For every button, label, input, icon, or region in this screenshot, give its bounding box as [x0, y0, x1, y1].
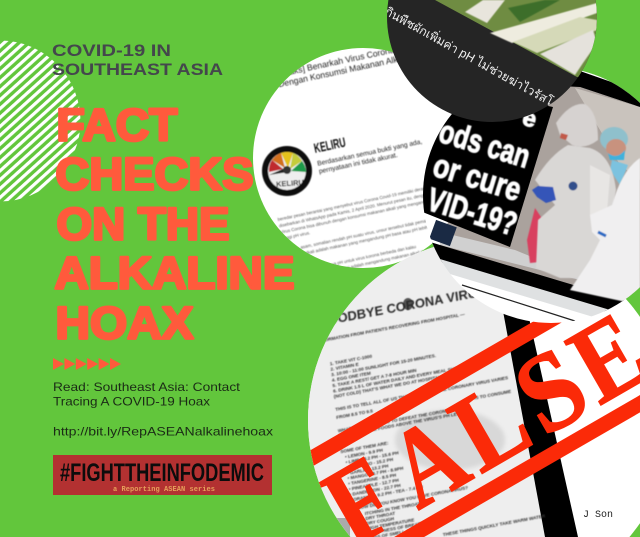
article body: disebarkan di WhatsApp pada Kamis, 2 April 2020. Menurut pesan itu, dengan merujuk ke: [279, 187, 451, 228]
Thai caption: กินพืชผักเพิ่มค่า pH ไม่ช่วยฆ่าไวรัสโค: [383, 3, 564, 113]
leaflet text: IS TO CONSUME: [474, 389, 511, 401]
leaflet text: DRY COUGH: [366, 516, 395, 526]
title: ON THE: [56, 198, 230, 250]
pink bag: [527, 208, 543, 263]
leaflet text: HOW DID YOU KNOW YOU HAVE CORONAVIRUS?: [357, 485, 468, 510]
leaflet text: • ORANGE - 9.2 PH - TEA - 7.4 PH: [350, 484, 424, 503]
question text: or cure: [429, 146, 526, 208]
photo of vegetables: [435, 0, 605, 80]
article body: Namun, asam, somalian rendah pH suatu virus, unsur tersebut tidak pemakan bakteri: [284, 214, 447, 253]
article body: [277, 187, 428, 268]
red FALSE stamp: [310, 314, 640, 537]
leaflet text: THIS IS TO TELL ALL OF US THAT THE PH OF THE CORONARY VIRUS VARIES: [335, 375, 508, 412]
read more text: [53, 380, 273, 438]
title: [54, 100, 294, 348]
banner: a Reporting ASEAN series: [113, 486, 215, 494]
leaflet text: • LIME - 8.2 PH - 15.6 PH: [345, 450, 399, 465]
read more text: http://bit.ly/RepASEANalkalinehoax: [53, 424, 273, 438]
article body: Pesan ini pemuat bahwa pH untuk virus korona berbeda dan kalau: [289, 244, 417, 276]
small photo patch: [429, 220, 457, 246]
leaflet text: SOME OF THEM ARE:: [340, 440, 389, 454]
leaflet text: FROM 8.5 TO 9.5: [336, 408, 374, 420]
subheading: COVID-19 IN: [52, 42, 171, 60]
red FALSE stamp: A: [369, 392, 488, 532]
title: FACT: [56, 100, 178, 150]
question text: ods can: [435, 112, 535, 175]
leaflet text: • AVOCADO - 15.2 PH: [346, 457, 394, 470]
bottom frame: [432, 242, 624, 312]
leaflet text: 2. VITAMIN E: [330, 361, 359, 372]
question text: [430, 114, 537, 236]
title: CHECKS: [56, 148, 254, 200]
leaflet text: INFORMATION FROM PATIENTS RECOVERING FROM HOSPITAL —: [317, 312, 465, 344]
article body: beredar pesan berantai yang menyebut virus Corona Covid-19 memiliki derajat keasaman (pH): [277, 179, 459, 222]
leaflet text: • DANDELION - 22.7 PH: [349, 483, 401, 497]
leaflet text: [314, 277, 546, 537]
black strip: [504, 314, 578, 537]
article body: Virus Corona bisa dibunuh dengan konsumsi makanan alkali yang mengandung: [280, 197, 433, 235]
striped circle: [0, 40, 80, 202]
leaflet text: DRY THROAT: [365, 511, 396, 521]
verdict text: KELIRU: [313, 135, 347, 156]
fact check headline: [Hoaks] Benarkah Virus Corona Bisa Dibunuh: [275, 33, 448, 79]
leaflet text: MORE ALKALINE FOODS ABOVE THE VIRUS'S PH LEVEL.: [338, 409, 467, 438]
article body: makanan alkali adalah makanan yang mengandung pH basa atau pH lebih dari: [285, 223, 437, 260]
banner: [53, 455, 272, 495]
read more text: Tracing A COVID-19 Hoax: [53, 394, 210, 408]
leaflet text: 6. DRINK 1.5 L OF WATER DAILY AND EVERY MEAL SHOULD: [333, 364, 468, 394]
top black band: [570, 72, 640, 107]
leaflet text: HIGH TEMPERATURE: [366, 517, 415, 531]
leaflet text: 5. TAKE A REST/ GET A 7-8 HOUR MIN: [332, 368, 417, 388]
panel: Thai fact check circle: [380, 0, 605, 125]
leaflet text: WHAT WE NEED TO DO TO DEFEAT THE CORONARY VIRUS: [338, 404, 471, 433]
leaflet text: (NOT COLD) THAT'S WHAT WE DO AT HOSPITAL: [333, 374, 442, 399]
credit: J Son: [583, 510, 613, 521]
red FALSE stamp: L: [431, 355, 550, 496]
question text: VID-19?: [423, 180, 522, 243]
verdict text: Berdasarkan semua bukti yang ada,: [317, 139, 423, 168]
figure in white foreground: [570, 158, 640, 305]
leaflet text: ITCHING IN THE THROAT: [365, 501, 421, 516]
leaflet text: THESE THINGS QUICKLY TAKE WARM WATER: [443, 513, 546, 537]
question text: e: [519, 104, 540, 134]
leaflet text: 4. EGG ONE ITEM: [332, 370, 371, 383]
photo backdrop: [440, 78, 640, 310]
panel: FALSE stamped leaflet circle: [308, 246, 640, 537]
arrows: [53, 358, 121, 370]
panel: photo circle of health worker: [420, 60, 640, 331]
article body: sejumlah orang yang konsumsi adalah mengandung makanan alkali tinggi: [290, 247, 432, 282]
leaflet text: • TANGERINE - 8.5 PH: [348, 472, 397, 486]
banner: #FIGHTTHEINFODEMIC: [60, 459, 264, 487]
leaflet text: GOODBYE CORONA VIRUS: [317, 283, 487, 329]
leaflet text: 1. TAKE VIT C-1000: [330, 353, 373, 366]
title: HOAX: [56, 298, 194, 348]
red FALSE stamp: S: [494, 322, 608, 459]
figure in protective suit: [532, 104, 616, 278]
title: ALKALINE: [54, 248, 294, 298]
leaflet photo smudge: [403, 298, 413, 310]
nurse in blue: [600, 127, 628, 185]
verdict text: pernyataan ini tidak akurat.: [318, 152, 398, 175]
leaflet paper: [300, 235, 548, 537]
leaflet text: • GARLIC - 13.2 PH: [347, 463, 389, 476]
gauge icon: [262, 146, 312, 196]
gauge icon: KELIRU: [276, 178, 304, 189]
leaflet text: • TURMERIC: [351, 498, 379, 508]
subheading: [52, 42, 223, 79]
black question panel: [423, 106, 553, 247]
fact check headline: Dengan Konsumsi Makanan Alkali?: [277, 51, 412, 89]
leaflet text: SHORTNESS OF BREATH: [367, 521, 425, 536]
article body: tinggi pH virus.: [281, 230, 311, 241]
leaflet text: • MANGO - 8.7 PH - 8.9PH: [347, 466, 404, 481]
leaflet text: • PINEAPPLE - 12.7 PH: [349, 478, 400, 492]
leaflet text: • LEMON - 9.9 PH: [345, 447, 384, 459]
subheading: SOUTHEAST ASIA: [52, 61, 223, 79]
read more text: Read: Southeast Asia: Contact: [53, 380, 241, 394]
panel: Indonesian fact check circle: [253, 48, 452, 268]
leaflet text: 3. 10:00 - 11:00 SUNLIGHT FOR 15-20 MINUTES.: [331, 353, 436, 377]
